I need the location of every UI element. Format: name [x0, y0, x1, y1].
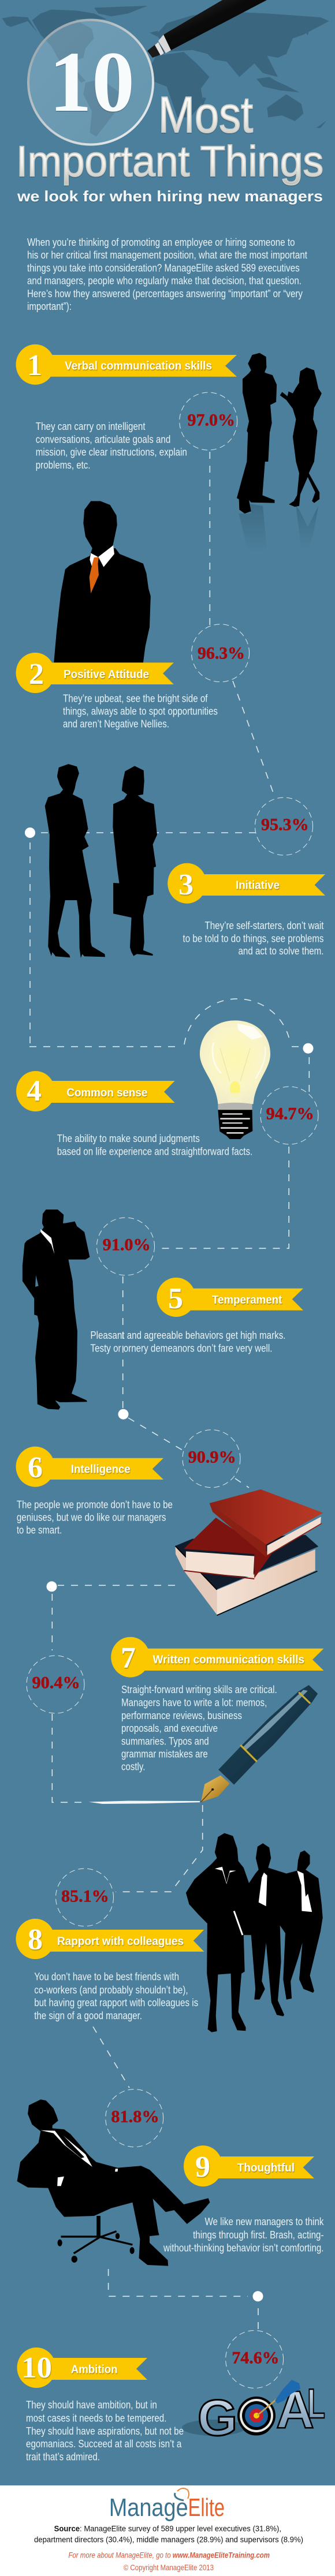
description 8: co-workers (and probably shouldn’t be), [34, 1984, 188, 1995]
description 4: The ability to make sound judgments [57, 1133, 200, 1144]
intro paragraph: important”): [27, 301, 72, 312]
percentage 96.3 [192, 624, 250, 682]
description 10: most cases it needs to be tempered. [26, 2413, 166, 2424]
description 6: to be smart. [17, 1525, 62, 1536]
silhouette: man on phone [23, 1210, 90, 1410]
percentage 97.0 [180, 392, 237, 450]
item 6: intelligence [16, 1430, 323, 1615]
ribbon 10: 10 [21, 2352, 52, 2384]
description 5: Testy or ornery demeanors don’t fare very well. [90, 1342, 273, 1354]
title line Important Things: Important Things [16, 137, 323, 185]
item 5: temperament [23, 1210, 303, 1410]
percentage 90.4 [27, 1656, 84, 1713]
percentage 94.7 [260, 1087, 318, 1144]
ribbon 10: Ambition [71, 2364, 118, 2376]
percentage 85.1 [55, 1869, 113, 1926]
icon: GOAL with target and dart [182, 2380, 325, 2446]
ribbon 7: Written communication skills [152, 1654, 304, 1667]
connector dots [25, 828, 313, 2301]
icon: fountain pen [89, 1685, 318, 1804]
intro paragraph [27, 237, 307, 312]
ribbon 3: 3 [178, 868, 193, 901]
description 7: Managers have to write a lot: memos, [121, 1697, 267, 1709]
percentage 91.0: 91.0% [103, 1235, 151, 1255]
description 6 [17, 1499, 173, 1536]
item 10: ambition [17, 2330, 325, 2462]
description 10: egomaniacs. Succeed at all costs isn’t a [26, 2438, 182, 2450]
description 2: They’re upbeat, see the bright side of [63, 693, 208, 705]
header [2, 0, 329, 205]
silhouette: two people talking [237, 353, 322, 552]
description 10: trait that’s admired. [26, 2451, 100, 2462]
ribbon 8 [16, 1919, 204, 1959]
description 7: Straight-forward writing skills are critical. [121, 1684, 277, 1695]
ribbon 6: 6 [28, 1451, 43, 1484]
icon: GOAL with target and dart: A [276, 2380, 314, 2439]
ribbon 3 [168, 863, 325, 904]
description 7 [121, 1684, 277, 1772]
icon: stack of books [175, 1489, 323, 1615]
ribbon 3: Initiative [236, 879, 280, 892]
website link line: For more about ManageElite, go to www.ManageEliteTraining.com [68, 2550, 270, 2559]
description 8 [34, 1971, 198, 2021]
description 10 [26, 2399, 184, 2462]
ribbon 1: Verbal communication skills [65, 360, 212, 373]
description 8: the sign of a good manager. [34, 2010, 142, 2021]
ribbon 1 [16, 345, 237, 385]
footer [34, 2488, 303, 2572]
description 1: problems, etc. [36, 459, 90, 471]
description 7: grammar mistakes are [121, 1748, 208, 1759]
ribbon 6 [16, 1447, 163, 1487]
description 7: costly. [121, 1761, 145, 1772]
item 1: verbal communication skills [16, 345, 322, 552]
ManageElite logo [109, 2488, 225, 2522]
white footer panel [0, 2485, 335, 2576]
ManageElite logo: Manage [109, 2493, 188, 2522]
percentage 90.9 [183, 1430, 240, 1488]
description 6: geniuses, but we do like our managers [17, 1512, 166, 1523]
description 7: performance reviews, business [121, 1710, 242, 1721]
description 7: proposals, and executive [121, 1723, 218, 1734]
percentage 74.6 [226, 2330, 284, 2388]
description 1: conversations, articulate goals and [36, 433, 170, 445]
ribbon 4: Common sense [66, 1087, 147, 1099]
ribbon 9 [184, 2146, 314, 2186]
silhouette: team of three [186, 1833, 323, 2032]
ribbon 5: Temperament [212, 1294, 282, 1306]
description 5: Pleasant and agreeable behaviors get high marks. [90, 1330, 285, 1341]
ribbon 6: Intelligence [71, 1463, 131, 1476]
description 8: You don’t have to be best friends with [34, 1971, 179, 1983]
percentage 85.1: 85.1% [61, 1887, 109, 1906]
ribbon 7: 7 [121, 1642, 136, 1675]
percentage 81.8 [106, 2089, 163, 2147]
description 1: They can carry on intelligent [36, 421, 146, 432]
silhouette: man reclining in office chair [17, 2099, 210, 2266]
description 10: They should have aspirations, but not be [26, 2425, 184, 2437]
ribbon 5 [157, 1278, 303, 1317]
percentage 81.8: 81.8% [111, 2107, 159, 2126]
description 2: and aren’t Negative Nellies. [63, 718, 169, 730]
ribbon 8: Rapport with colleagues [57, 1935, 184, 1948]
description 3 [183, 920, 323, 957]
description 1 [36, 421, 187, 471]
silhouette: two businesswomen [45, 764, 157, 958]
description 4: based on life experience and straightforward facts. [57, 1145, 252, 1157]
ManageElite logo: Elite [188, 2493, 225, 2522]
percentage 91.0 [97, 1218, 155, 1275]
world map [2, 6, 329, 137]
ribbon 2 [16, 653, 174, 693]
description 7: summaries. Typos and [121, 1735, 209, 1747]
ribbon 2: Positive Attitude [64, 668, 149, 681]
source note: Source: ManageElite survey of 589 upper level executives (31.8%), [54, 2524, 281, 2533]
percentage 90.4: 90.4% [32, 1673, 80, 1693]
source note [34, 2524, 303, 2544]
icon: light bulb [200, 1020, 270, 1139]
icon: GOAL with target and dart: G [198, 2389, 237, 2446]
percentage 95.3 [255, 797, 313, 855]
icon: GOAL with target and dart: L [307, 2381, 325, 2427]
ribbon 2: 2 [29, 658, 44, 691]
percentage 90.9: 90.9% [188, 1447, 236, 1466]
percentage 94.7: 94.7% [266, 1104, 314, 1123]
description 5 [90, 1330, 285, 1354]
ribbon 8: 8 [28, 1923, 43, 1956]
ribbon 5: 5 [168, 1282, 183, 1315]
ribbon 7 [111, 1637, 323, 1678]
description 1: mission, give clear instructions, explain [36, 447, 187, 458]
description 2 [63, 693, 218, 730]
icon: GOAL with target and dart: O [238, 2388, 275, 2445]
description 4 [57, 1133, 252, 1157]
item 4: common sense [16, 1020, 318, 1157]
magnifying glass [28, 0, 267, 144]
description 6: The people we promote don’t have to be [17, 1499, 173, 1510]
percentage 96.3: 96.3% [198, 644, 245, 663]
description 10: They should have ambition, but in [26, 2399, 157, 2410]
percentage 95.3: 95.3% [261, 815, 309, 834]
ribbon 9: Thoughtful [237, 2162, 295, 2174]
description 8: but having great rapport with colleagues is [34, 1997, 198, 2009]
item 7: written communication skills [27, 1637, 323, 1804]
ribbon 10 [17, 2347, 147, 2388]
ribbon 4: 4 [27, 1074, 42, 1107]
percentage 97.0: 97.0% [187, 410, 235, 429]
percentage 74.6: 74.6% [232, 2349, 280, 2368]
ribbon 1: 1 [27, 349, 42, 382]
title number 10: 10 [49, 34, 135, 130]
item 2: positive attitude [16, 501, 250, 730]
item 3: initiative [45, 764, 325, 958]
item 9: thoughtful [17, 2089, 324, 2266]
subtitle: we look for when hiring new managers [17, 188, 323, 205]
title word Most: Most [158, 86, 253, 143]
dashed connector path between percentages [25, 452, 313, 2330]
ribbon 9: 9 [195, 2151, 210, 2184]
copyright line: © Copyright ManageElite 2013 [124, 2563, 214, 2572]
item 8: rapport with colleagues [16, 1833, 323, 2032]
silhouette: man with orange tie [54, 501, 151, 662]
description 9 [163, 2216, 324, 2253]
ribbon 4 [16, 1071, 175, 1111]
source note: department directors (30.4%), middle managers (28.9%) and supervisors (8.9%) [34, 2535, 303, 2544]
description 2: things, always able to spot opportunities [63, 705, 218, 717]
